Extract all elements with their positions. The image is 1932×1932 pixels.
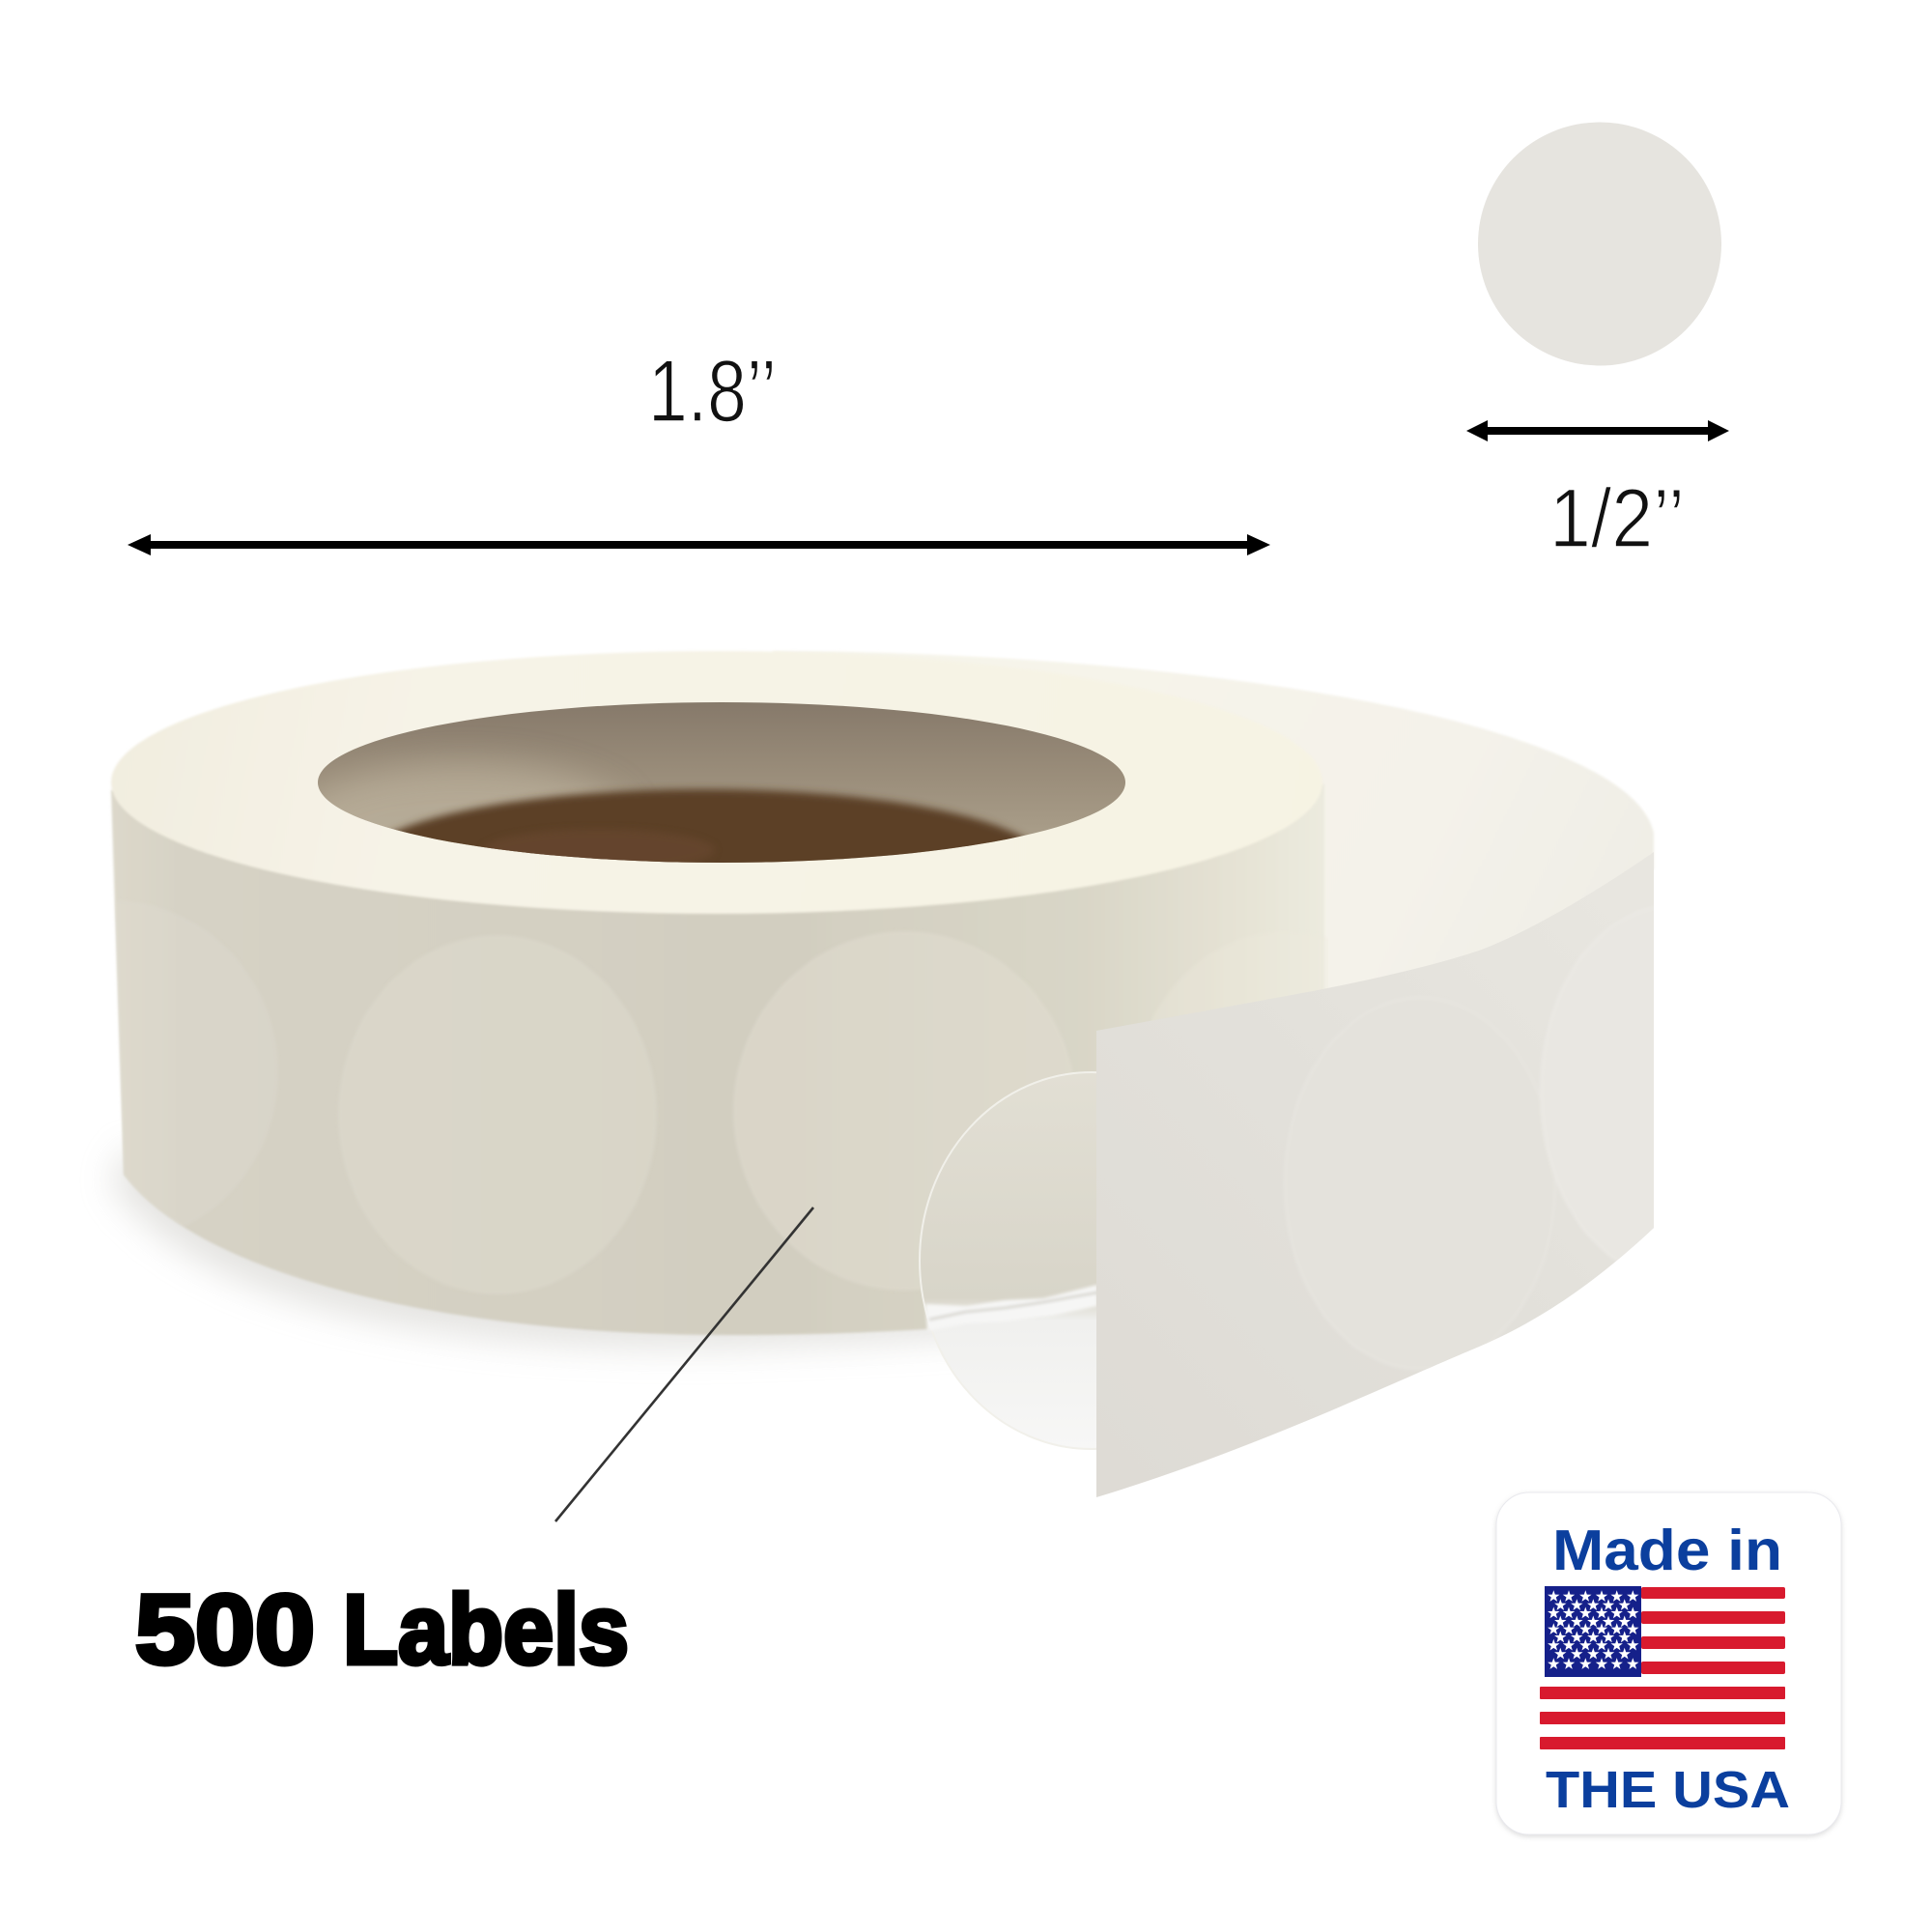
- roll ground shadow: [111, 1150, 1063, 1348]
- cardboard core: [390, 784, 1028, 863]
- roll side wall: [111, 784, 1324, 1335]
- unrolled strip front: [1096, 852, 1654, 1497]
- leader line to label: [555, 1208, 813, 1521]
- label count: 500: [135, 1575, 315, 1685]
- badge: made in the USA: [1496, 1492, 1841, 1836]
- badge top text: Made in: [1552, 1519, 1782, 1582]
- label count: Labels: [343, 1575, 629, 1685]
- icon: US flag: [1540, 1586, 1785, 1749]
- glossy reflection: [925, 1285, 1097, 1331]
- labels on roll side: [736, 949, 839, 1271]
- label circle swatch: [1478, 122, 1721, 365]
- label count: [135, 1575, 629, 1685]
- dimension: label diameter 1/2 inch: 1/2’’: [1549, 472, 1685, 565]
- badge shadow: [1496, 1494, 1841, 1836]
- infographic canvas: [108, 122, 1843, 1839]
- peeled label: [919, 1071, 1096, 1450]
- roll core hole: [318, 702, 1125, 863]
- unrolled strip back band: [773, 651, 1654, 1063]
- arrow: label diameter: [1466, 420, 1729, 441]
- roll top face: [111, 651, 1322, 914]
- dimension: roll width 1.8 inch: 1.8’’: [648, 343, 777, 440]
- labels on strip: [1447, 1349, 1474, 1360]
- badge bottom text: THE USA: [1546, 1761, 1790, 1819]
- arrow: roll width: [128, 534, 1270, 555]
- badge panel: [1496, 1492, 1841, 1834]
- roll of labels: [108, 650, 1654, 1497]
